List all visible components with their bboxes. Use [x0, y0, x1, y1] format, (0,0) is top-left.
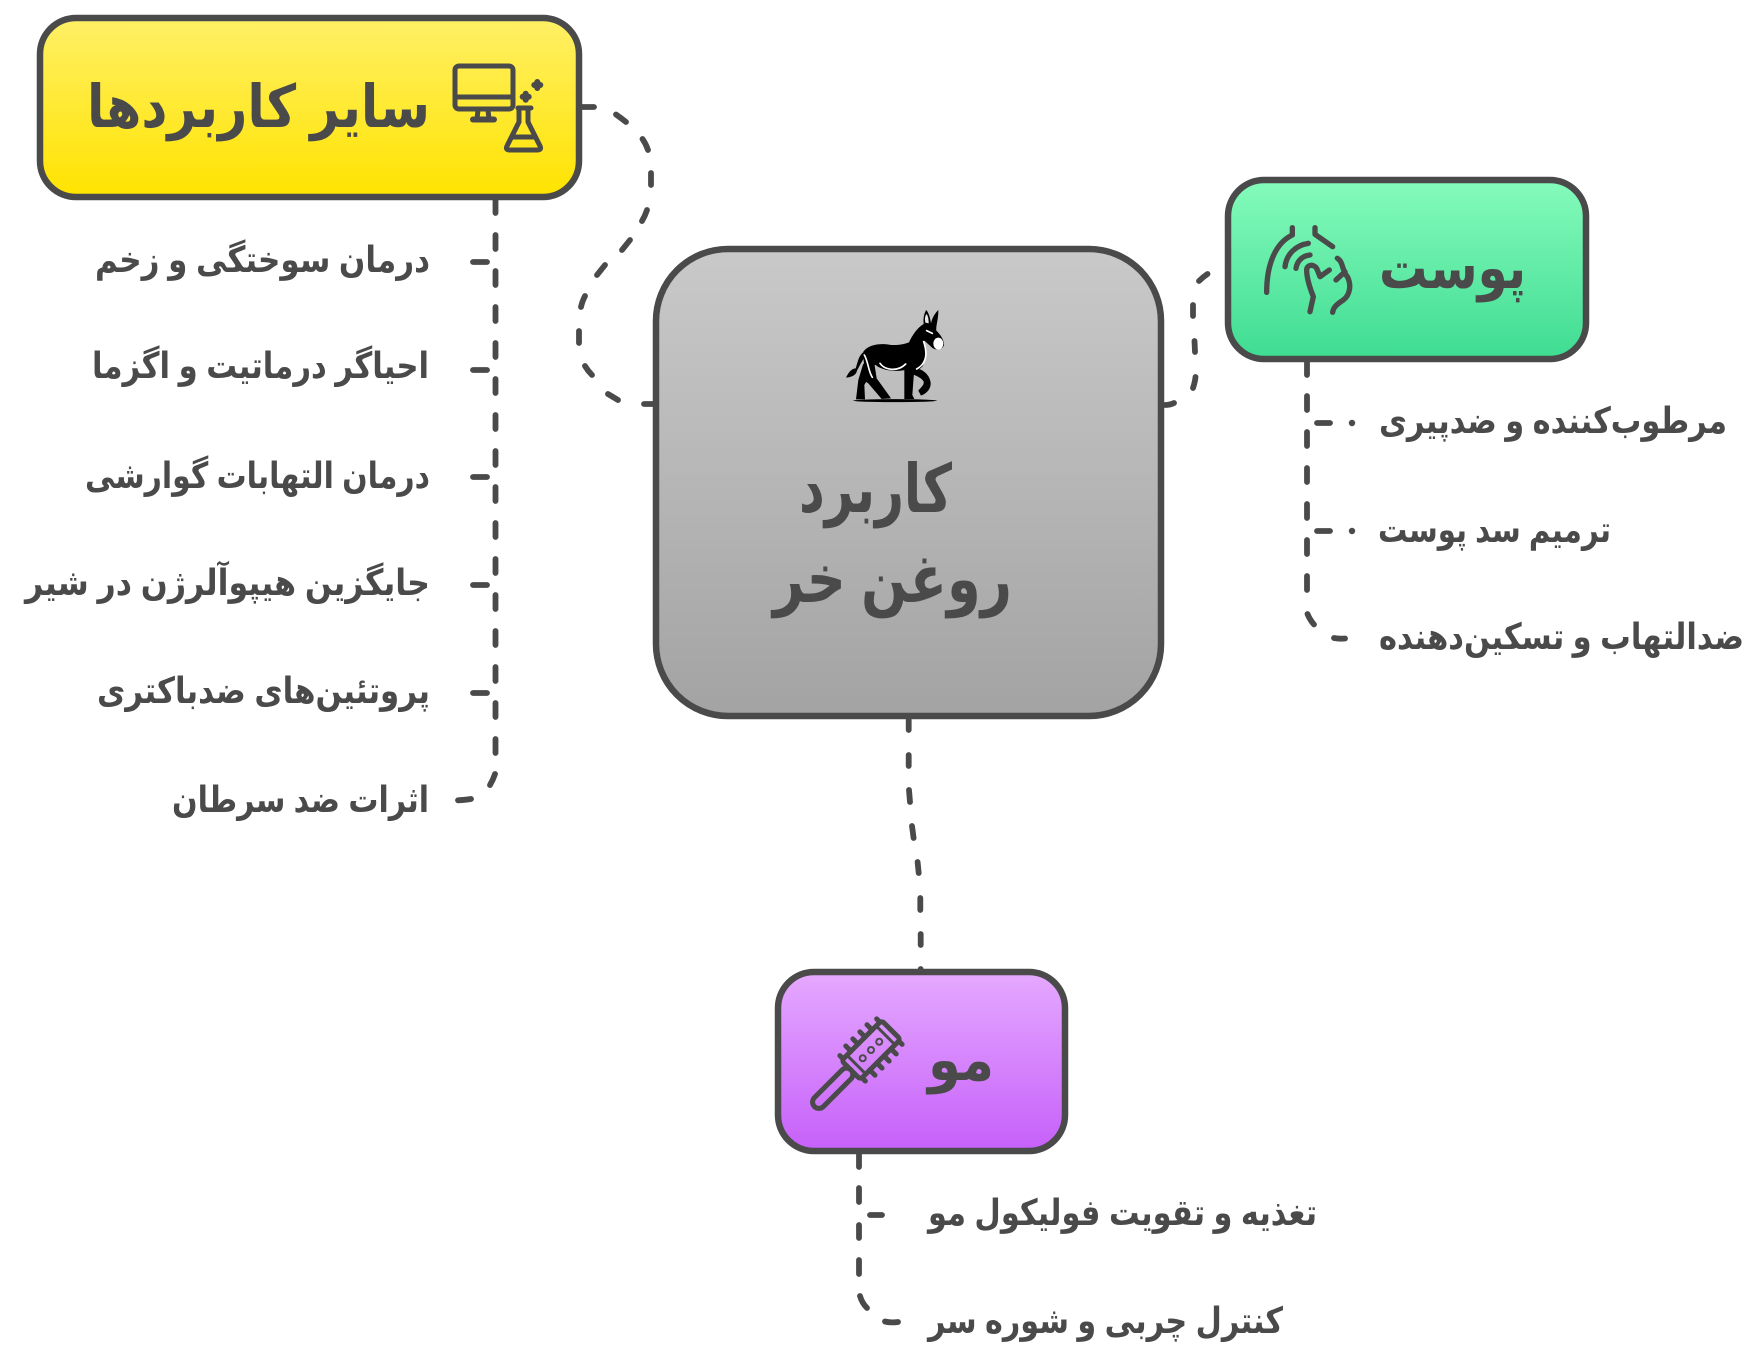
icon: donkey [846, 310, 944, 402]
item: burn and wound treatment: درمان سوختگی و زخم [95, 239, 430, 281]
item: digestive inflammation: درمان التهابات گوارشی [85, 455, 430, 497]
heading: central title line 2: روغن خر [771, 542, 1012, 619]
panel: other uses [40, 18, 579, 197]
item: milk substitute: جایگزین هیپوآلرژن در شیر [23, 560, 430, 604]
panel: hair [778, 972, 1065, 1151]
item: follicle nourishment: تغذیه و تقویت فولیکول مو [926, 1192, 1317, 1234]
item: dermatitis and eczema: احیاگر درماتیت و اگزما [92, 345, 429, 387]
list: skin items [1378, 400, 1744, 658]
connector: central node to other uses [579, 107, 654, 404]
connector: other uses branch [458, 200, 496, 800]
panel: skin [1228, 180, 1586, 359]
dots: skin list bullets [1349, 420, 1355, 534]
item: skin barrier repair: ترمیم سد پوست [1378, 509, 1611, 551]
list: hair items [926, 1192, 1317, 1342]
connector: central node to skin [1165, 274, 1208, 405]
connector: hair branch [859, 1154, 898, 1322]
item: anti-cancer effects: اثرات ضد سرطان [172, 779, 429, 821]
list: other uses items [23, 239, 430, 821]
connector: skin branch [1307, 362, 1345, 639]
heading: central title line 1: کاربرد [799, 452, 952, 529]
icon: computer and flask [455, 66, 541, 150]
panel: central node [656, 249, 1161, 716]
heading: other uses: سایر کاربردها [87, 74, 430, 142]
item: antibacterial proteins: پروتئین‌های ضدباکتری [97, 670, 430, 712]
connector: central node to hair [909, 720, 921, 970]
icon: hair brush [800, 1015, 906, 1121]
heading: hair: مو [925, 1027, 994, 1095]
heading: skin: پوست [1379, 235, 1526, 303]
icon: hand touching skin [1267, 228, 1350, 312]
item: oil and dandruff control: کنترل چربی و شوره سر [926, 1300, 1283, 1342]
